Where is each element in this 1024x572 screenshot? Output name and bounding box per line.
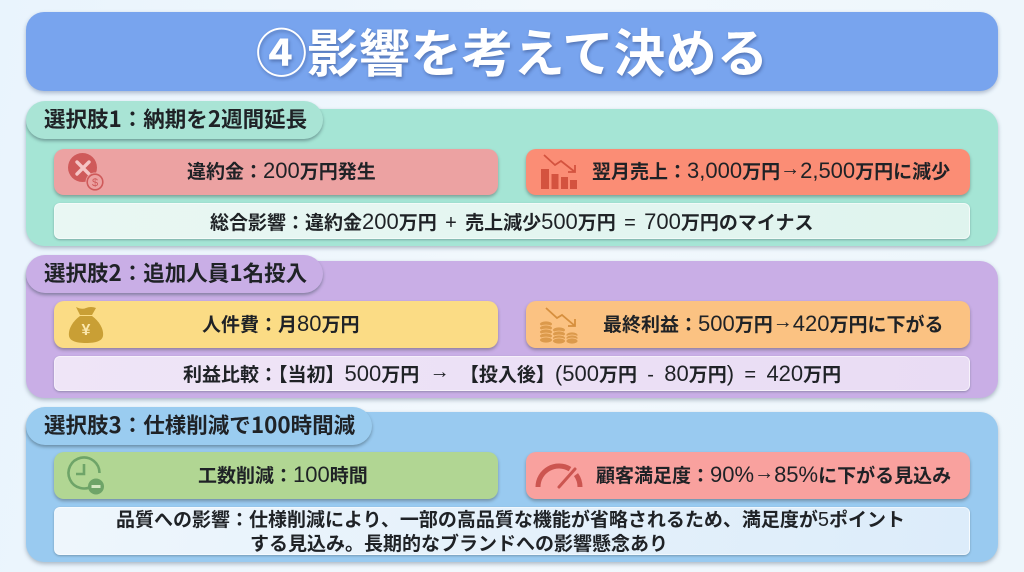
card: penalty [54, 149, 498, 195]
panel: option 3 [23, 407, 1000, 566]
icon: yen money bag: ¥ [82, 322, 91, 339]
text: next month sales: 翌月売上：3,000万円→2,500万円に減少 [592, 157, 950, 184]
icon: gauge [536, 464, 582, 489]
icon: penalty x and dollar [68, 153, 104, 191]
text: profit comparison: 利益比較：【当初】500万円 → 【投入後】(500万円 - 80万円) = 420万円 [183, 360, 841, 387]
heading: option 3: 選択肢3：仕様削減で100時間減 [44, 408, 355, 440]
summary: total impact [54, 203, 970, 239]
icon: yen money bag [68, 307, 104, 343]
panel: option 2 [23, 255, 1000, 402]
text: quality impact line 2: する見込み。長期的なブランドへの影響懸念あり [250, 529, 668, 556]
heading: option 2: 選択肢2：追加人員1名投入 [44, 256, 307, 288]
title banner [26, 12, 998, 91]
text: total impact: 総合影響：違約金200万円 + 売上減少500万円 = 700万円のマイナス [210, 208, 813, 235]
icon: coins with falling arrow [540, 308, 578, 344]
text: work hours reduction: 工数削減：100時間 [198, 461, 368, 488]
icon: penalty x and dollar: $ [92, 177, 98, 189]
card: labor cost [54, 301, 498, 348]
panel background 3 [26, 412, 998, 562]
summary: quality impact [54, 507, 970, 555]
text: penalty: 違約金：200万円発生 [187, 157, 376, 184]
text: labor cost: 人件費：月80万円 [202, 310, 360, 337]
title: ④影響を考えて決める [256, 12, 768, 87]
icon: falling bar chart [541, 154, 577, 189]
card: customer satisfaction [526, 452, 970, 499]
text: final profit: 最終利益：500万円→420万円に下がる [603, 310, 943, 337]
panel: option 1 [24, 101, 1000, 250]
card: work hours reduction [54, 452, 498, 499]
text: customer satisfaction: 顧客満足度：90%→85%に下がる見込み [596, 461, 951, 488]
panel background 2 [26, 261, 998, 398]
card: final profit [526, 301, 970, 348]
summary: profit comparison [54, 356, 970, 391]
heading: option 1: 選択肢1：納期を2週間延長 [44, 102, 307, 134]
text: quality impact line 1: 品質への影響：仕様削減により、一部の高品質な機能が省略されるため、満足度が5ポイント [116, 505, 905, 532]
panel background 1 [26, 109, 998, 246]
card: next month sales [526, 149, 970, 195]
icon: clock with minus [67, 456, 104, 494]
